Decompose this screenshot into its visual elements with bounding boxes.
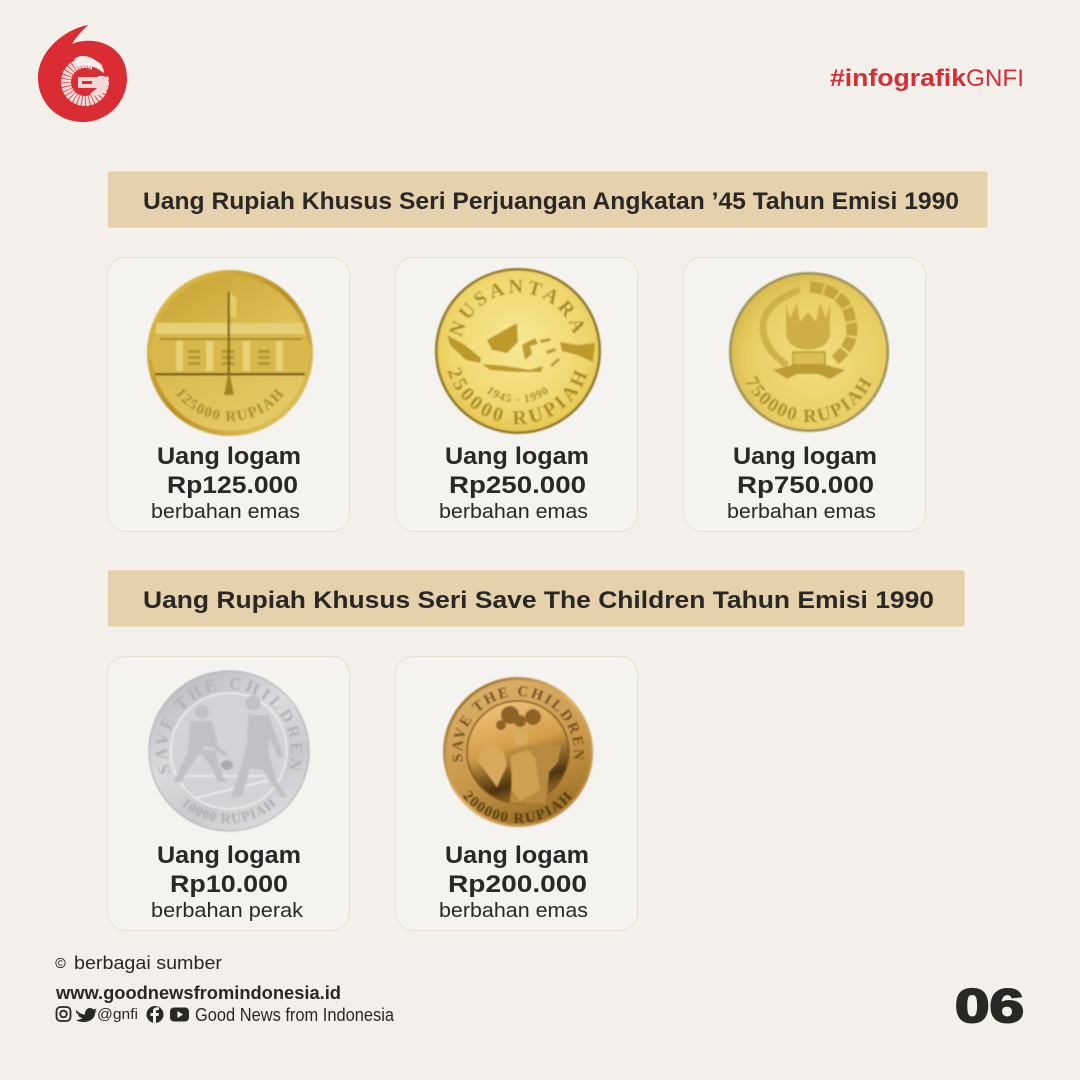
hashtag label: GNFI [966, 65, 1024, 92]
label: Rp250.000: berbahan emas [439, 501, 588, 523]
label: Rp200.000: Uang logam [445, 842, 589, 869]
label: Rp200.000 [439, 842, 589, 922]
source note: berbagai sumber [74, 953, 222, 973]
label: Rp10.000: berbahan perak [151, 900, 304, 922]
coin image: Rp10.000 silver: 10000 RUPIAH [182, 798, 276, 824]
label: Rp750.000: Rp750.000 [737, 472, 874, 499]
coin image: Rp200.000 gold: SAVE THE CHILDREN [452, 686, 584, 762]
section heading: Save The Children [107, 570, 966, 628]
panel: coin Rp10.000 [107, 656, 350, 931]
coin image: Rp200.000 gold [442, 676, 594, 828]
coin image: Rp750.000 gold [728, 271, 890, 433]
label: Rp10.000: Uang logam [157, 842, 301, 869]
section heading: Perjuangan Angkatan 45: Uang Rupiah Khusus Seri Perjuangan Angkatan ’45 Tahun Emisi 1990 [143, 188, 959, 215]
label: Rp125.000 [151, 443, 301, 523]
label: Rp200.000: Rp200.000 [448, 871, 587, 898]
label: Rp750.000 [727, 443, 877, 523]
coin image: Rp125.000 gold [146, 269, 314, 437]
coin image: Rp250.000 gold: NUSANTARA [448, 279, 584, 338]
label: Rp250.000: Rp250.000 [449, 472, 586, 499]
icon: youtube [170, 1008, 189, 1022]
label: Rp125.000: Rp125.000 [167, 472, 298, 499]
label: Rp250.000: Uang logam [445, 443, 589, 470]
icon: facebook [146, 1006, 164, 1023]
label: Rp125.000: Uang logam [157, 443, 301, 470]
coin image: Rp125.000 gold: 125000 RUPIAH [176, 388, 284, 422]
hashtag label: #infografik [830, 65, 967, 92]
panel: coin Rp750.000 [683, 257, 926, 532]
coin image: Rp10.000 silver: SAVE THE CHILDREN [156, 678, 302, 774]
coin image: Rp750.000 gold: 750000 RUPIAH [746, 376, 872, 423]
coin image: Rp10.000 silver [148, 670, 310, 832]
panel: coin Rp200.000 [395, 656, 638, 931]
logo: GNFI red six with garuda G [38, 25, 127, 122]
label: Rp750.000: berbahan emas [727, 501, 876, 523]
label: Rp10.000 [151, 842, 304, 922]
page number: 06 [955, 979, 1024, 1032]
panel: coin Rp250.000 [395, 257, 638, 532]
handle text: @gnfi [97, 1006, 138, 1023]
website url: www.goodnewsfromindonesia.id [55, 983, 341, 1003]
icon: twitter [76, 1008, 97, 1022]
social handles [56, 1005, 395, 1025]
hashtag label [830, 65, 1024, 92]
label: Rp200.000: berbahan emas [439, 900, 588, 922]
label: Rp750.000: Uang logam [733, 443, 877, 470]
section heading: Save The Children: Uang Rupiah Khusus Seri Save The Children Tahun Emisi 1990 [143, 587, 934, 614]
label: Rp250.000 [439, 443, 589, 523]
coin image: Rp250.000 gold [434, 267, 602, 435]
page name: Good News from Indonesia [195, 1005, 395, 1025]
panel: coin Rp125.000 [107, 257, 350, 532]
coin image: Rp200.000 gold: 200000 RUPIAH [462, 790, 572, 824]
coin image: Rp250.000 gold: 1945 - 1990 [486, 386, 548, 403]
coin image: Rp250.000 gold: 250000 RUPIAH [447, 367, 588, 425]
label: Rp10.000: Rp10.000 [170, 871, 288, 898]
section heading: Perjuangan Angkatan 45 [107, 170, 988, 228]
icon: instagram [56, 1007, 70, 1021]
label: Rp125.000: berbahan emas [151, 501, 300, 523]
